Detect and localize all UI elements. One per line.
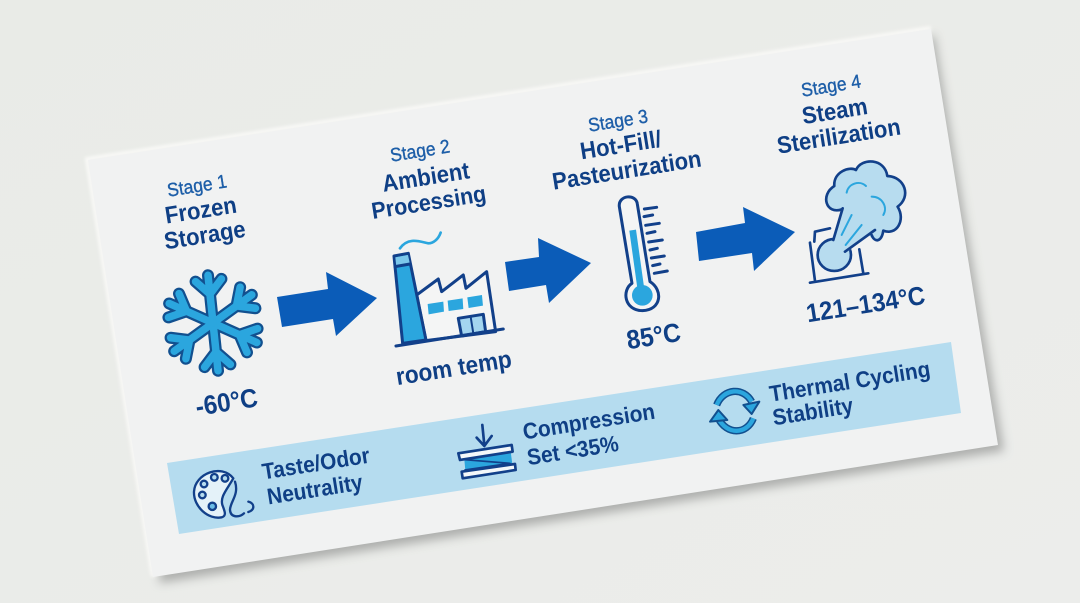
stage 3 bbox=[550, 105, 703, 355]
property: compression set: Compression bbox=[521, 398, 657, 445]
property: thermal cycling stability: Thermal Cycling bbox=[768, 356, 932, 407]
stage 2: Processing bbox=[370, 180, 488, 224]
stage 1 bbox=[162, 170, 260, 422]
property: compression set bbox=[458, 398, 657, 478]
stage 2: Ambient bbox=[380, 156, 472, 197]
panel: card bbox=[88, 29, 998, 577]
stage 4: Steam bbox=[800, 92, 869, 129]
icon: palette and nose bbox=[194, 471, 253, 518]
arrow: stage 1 to 2 bbox=[277, 272, 377, 336]
stage 2: room temp bbox=[394, 345, 513, 390]
stage 1: Stage 1 bbox=[165, 170, 228, 201]
property: thermal cycling stability bbox=[710, 356, 932, 431]
arrow: stage 2 to 3 bbox=[505, 238, 591, 303]
stage 4: Stage 4 bbox=[799, 70, 862, 101]
stage 3: 85°C bbox=[624, 318, 683, 355]
property: thermal cycling stability: Stability bbox=[771, 392, 855, 430]
stage 2: Stage 2 bbox=[388, 135, 451, 166]
stage 1: Frozen bbox=[163, 191, 238, 229]
stage 3: Pasteurization bbox=[550, 145, 703, 195]
property: taste and odor neutrality bbox=[194, 442, 372, 518]
icon: compression plates bbox=[458, 425, 516, 478]
property: compression set: Set <35% bbox=[525, 430, 620, 470]
stage 2 bbox=[370, 135, 513, 390]
stage 3: Hot-Fill/ bbox=[578, 125, 664, 165]
arrow: stage 3 to 4 bbox=[696, 207, 795, 271]
icon: factory bbox=[394, 233, 503, 346]
property: taste and odor neutrality: Neutrality bbox=[265, 469, 364, 510]
property: taste and odor neutrality: Taste/Odor bbox=[260, 442, 372, 485]
stage 3: Stage 3 bbox=[586, 105, 649, 136]
icon: thermometer bbox=[619, 197, 667, 311]
panel: properties band bbox=[167, 342, 961, 534]
stage 1: Storage bbox=[162, 215, 247, 255]
icon: cycle arrows bbox=[710, 391, 759, 431]
stage 4: Sterilization bbox=[775, 113, 902, 159]
stage 1: -60°C bbox=[193, 384, 260, 422]
icon: steam sterilizer bbox=[810, 161, 905, 283]
stage 4 bbox=[775, 70, 927, 329]
stage 4: 121–134°C bbox=[804, 281, 927, 329]
icon: snowflake bbox=[160, 270, 266, 376]
